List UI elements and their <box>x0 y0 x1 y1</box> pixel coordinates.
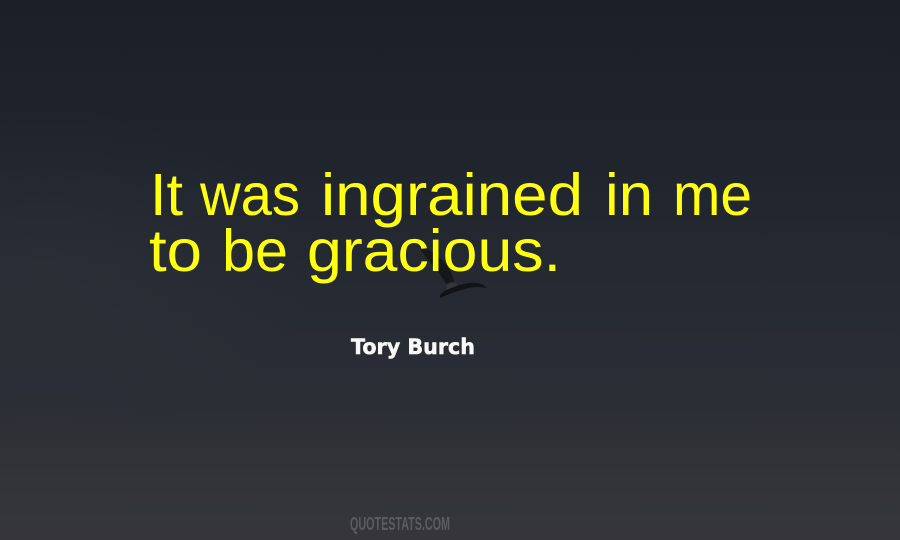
quote text: me <box>673 162 752 228</box>
author name: Tory Burch <box>351 335 475 359</box>
quote text: It <box>150 162 183 228</box>
icon: silhouette of a bird <box>419 246 487 298</box>
quote text <box>149 162 752 284</box>
watermark: QUOTESTATS.COM <box>350 514 450 534</box>
quote text: ingrained <box>321 162 583 228</box>
quote text: in <box>605 162 653 228</box>
quote text: gracious. <box>307 218 561 284</box>
quote text: was <box>199 162 300 228</box>
quote text: to <box>149 218 202 284</box>
quote text: be <box>222 218 288 284</box>
